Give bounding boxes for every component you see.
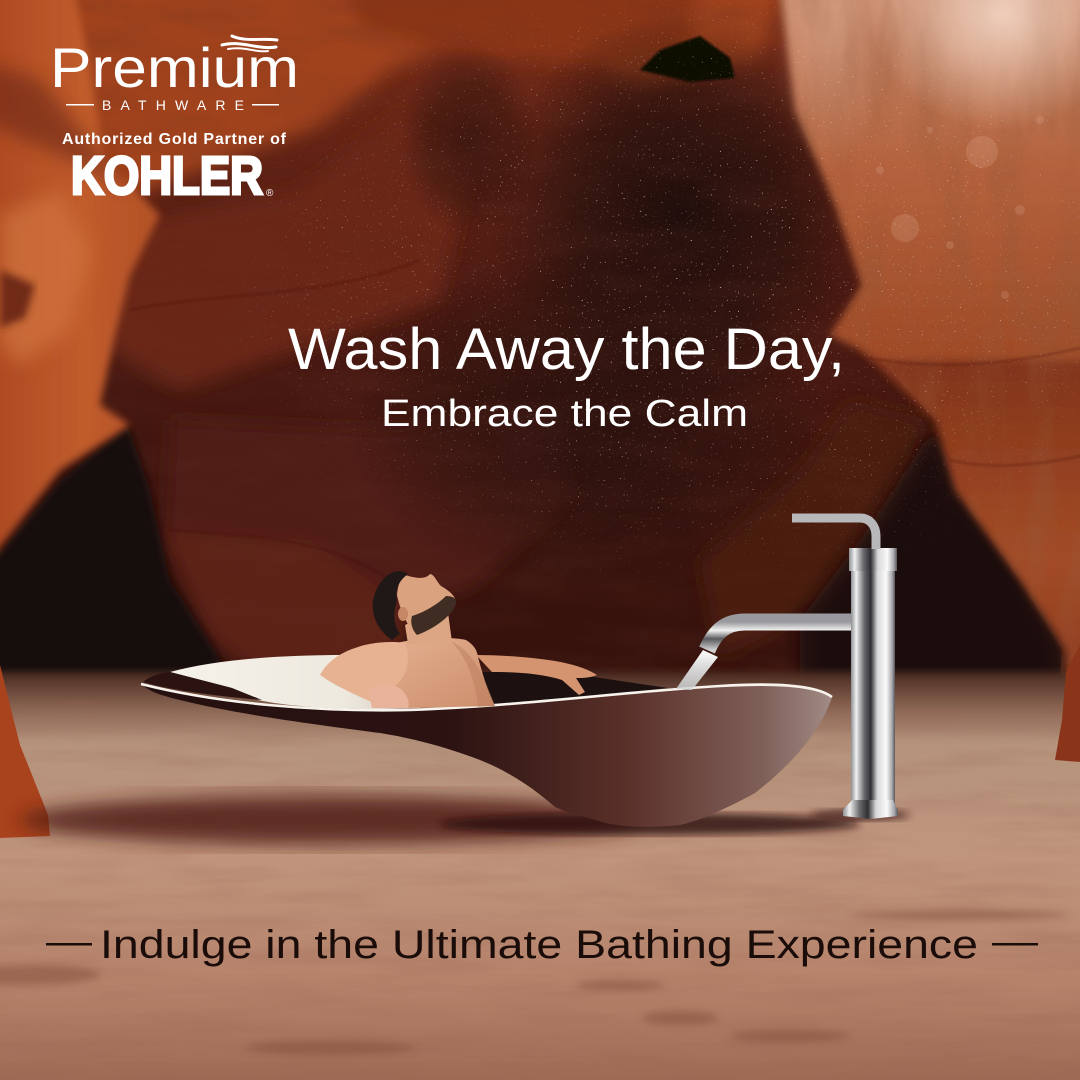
chest shade bbox=[452, 642, 495, 707]
man relaxing in the tub bbox=[320, 571, 597, 708]
right dark cave bbox=[800, 425, 1072, 720]
neck bbox=[405, 605, 452, 644]
upper-right light bbox=[870, 0, 1080, 130]
lower left rock column over the sand bbox=[0, 665, 50, 838]
handle bbox=[792, 518, 876, 549]
near hand bbox=[368, 685, 409, 708]
tagline: Indulge in the Ultimate Bathing Experience bbox=[100, 923, 978, 967]
near arm bbox=[320, 642, 408, 702]
right lower rock bbox=[860, 345, 1080, 770]
base bbox=[843, 800, 898, 819]
water stream bbox=[676, 650, 718, 690]
kohler logo: KOHLER bbox=[71, 146, 263, 206]
right wall streak texture bbox=[801, 0, 1080, 672]
bathware line: BATHWARE bbox=[102, 97, 244, 113]
spout bbox=[707, 622, 855, 650]
sparkling particles bbox=[211, 0, 1080, 594]
torso bbox=[365, 638, 495, 708]
tub right dark interior bbox=[480, 672, 668, 706]
tub left dark interior bbox=[143, 672, 262, 700]
collar bbox=[849, 548, 897, 571]
tub inner white surface bbox=[170, 655, 420, 709]
bathtub bbox=[141, 655, 832, 827]
background: canyon rock bbox=[0, 0, 1080, 676]
left pillar bbox=[0, 0, 160, 585]
column bbox=[851, 568, 895, 808]
hair bbox=[373, 571, 408, 640]
logo wave mark bbox=[222, 36, 277, 51]
tub outer body bbox=[141, 684, 832, 827]
ear bbox=[398, 607, 408, 621]
logo: Premium Bathware bbox=[50, 36, 299, 206]
tub bright rim bbox=[141, 684, 832, 710]
dark hole near the top bbox=[640, 36, 735, 82]
sand floor bbox=[0, 672, 1080, 1080]
dark central cavity bbox=[490, 15, 870, 415]
face bbox=[397, 574, 456, 634]
rock strata texture bbox=[0, 0, 1080, 720]
lower right rock foot over the sand bbox=[1055, 645, 1080, 762]
headline: Wash Away the Day, bbox=[288, 317, 845, 382]
subheading: Embrace the Calm bbox=[381, 393, 748, 435]
left cave opening bbox=[0, 425, 240, 700]
far arm bbox=[476, 655, 597, 695]
tub shadow on the sand bbox=[20, 796, 910, 844]
beard bbox=[411, 596, 456, 635]
right wall bbox=[778, 0, 1080, 360]
bokeh bubbles on right wall bbox=[876, 116, 1044, 299]
registered mark: ® bbox=[266, 188, 274, 199]
partner text: Authorized Gold Partner of bbox=[62, 131, 287, 148]
wordmark: Premium bbox=[50, 36, 299, 99]
chrome faucet bbox=[676, 518, 898, 819]
